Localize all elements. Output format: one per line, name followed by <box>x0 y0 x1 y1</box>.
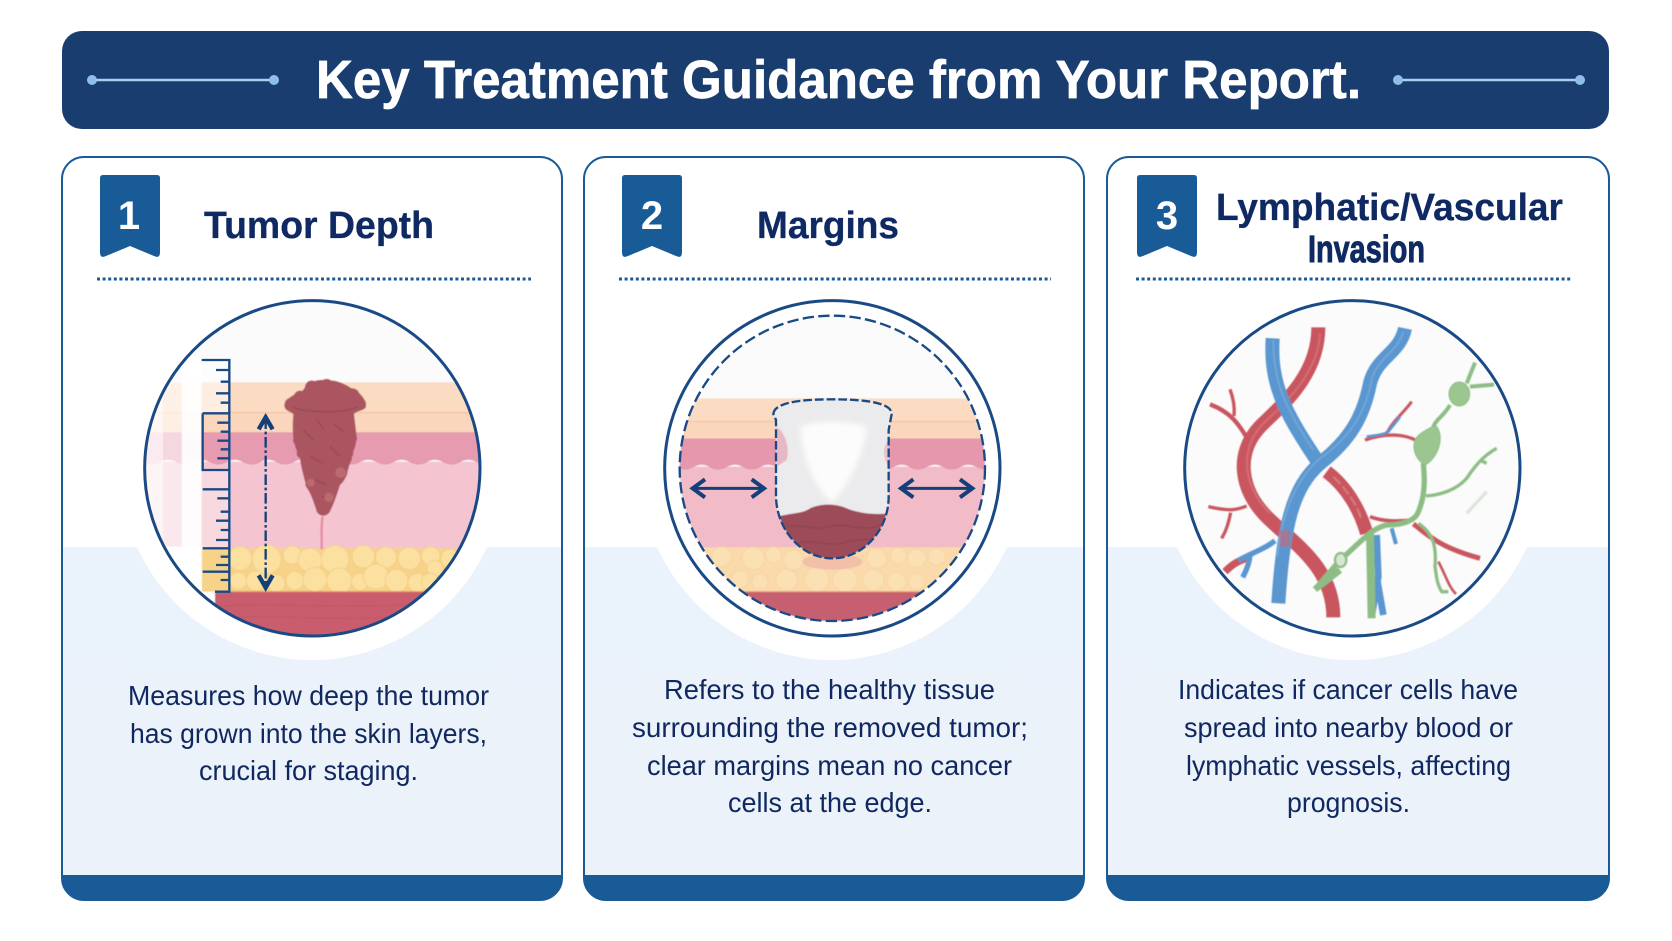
excision cavity <box>773 399 892 563</box>
description: crucial for staging. <box>199 755 418 786</box>
illustration: blood and lymphatic vessels <box>1185 301 1520 636</box>
vein crossing <box>1272 338 1317 460</box>
residual tumor <box>780 504 886 559</box>
panel: tumor depth <box>62 157 562 900</box>
artery lower branch <box>1327 472 1367 533</box>
badge 2 <box>622 175 682 257</box>
description: Indicates if cancer cells have <box>1178 674 1518 705</box>
tumor <box>284 379 366 516</box>
description: Refers to the healthy tissue <box>664 674 995 705</box>
margin arrow left <box>693 479 764 497</box>
badge 1 <box>100 175 160 257</box>
description: Measures how deep the tumor <box>128 680 489 711</box>
heading: lymphatic/vascular invasion: Invasion <box>1308 229 1425 271</box>
heading: lymphatic/vascular invasion: Lymphatic/Vascular <box>1216 187 1563 229</box>
heading: margins: Margins <box>757 205 899 247</box>
ruler <box>202 360 229 592</box>
description: cells at the edge. <box>728 787 932 818</box>
banner ornament left <box>87 75 279 85</box>
artery <box>1244 327 1333 617</box>
badge 3 <box>1137 175 1197 257</box>
badge 2: 2 <box>641 194 663 238</box>
vein <box>1277 328 1405 603</box>
description <box>128 680 489 786</box>
margin arrow right <box>901 479 972 497</box>
description: surrounding the removed tumor; <box>632 712 1028 743</box>
heading: tumor depth: Tumor Depth <box>204 205 434 247</box>
description: clear margins mean no cancer <box>647 750 1012 781</box>
heading: lymphatic/vascular invasion <box>1216 187 1563 271</box>
title: Key Treatment Guidance from Your Report. <box>316 50 1361 110</box>
badge 1: 1 <box>118 194 140 238</box>
description: lymphatic vessels, affecting <box>1186 750 1511 781</box>
banner ornament right <box>1393 75 1585 85</box>
title banner <box>62 31 1609 129</box>
depth arrow <box>259 417 273 588</box>
small vessel branches <box>1208 389 1480 594</box>
description: has grown into the skin layers, <box>130 718 487 749</box>
illustration: excised tissue with margins <box>665 301 1000 636</box>
panel: margins <box>584 157 1084 900</box>
description <box>1178 674 1518 818</box>
lymphatic vessels <box>1315 363 1497 618</box>
badge 3: 3 <box>1156 194 1178 238</box>
description <box>632 674 1028 818</box>
description: spread into nearby blood or <box>1184 712 1513 743</box>
illustration: skin layers with tumor and ruler <box>143 301 493 640</box>
panel: lymphatic/vascular invasion <box>1107 157 1609 900</box>
description: prognosis. <box>1287 787 1410 818</box>
